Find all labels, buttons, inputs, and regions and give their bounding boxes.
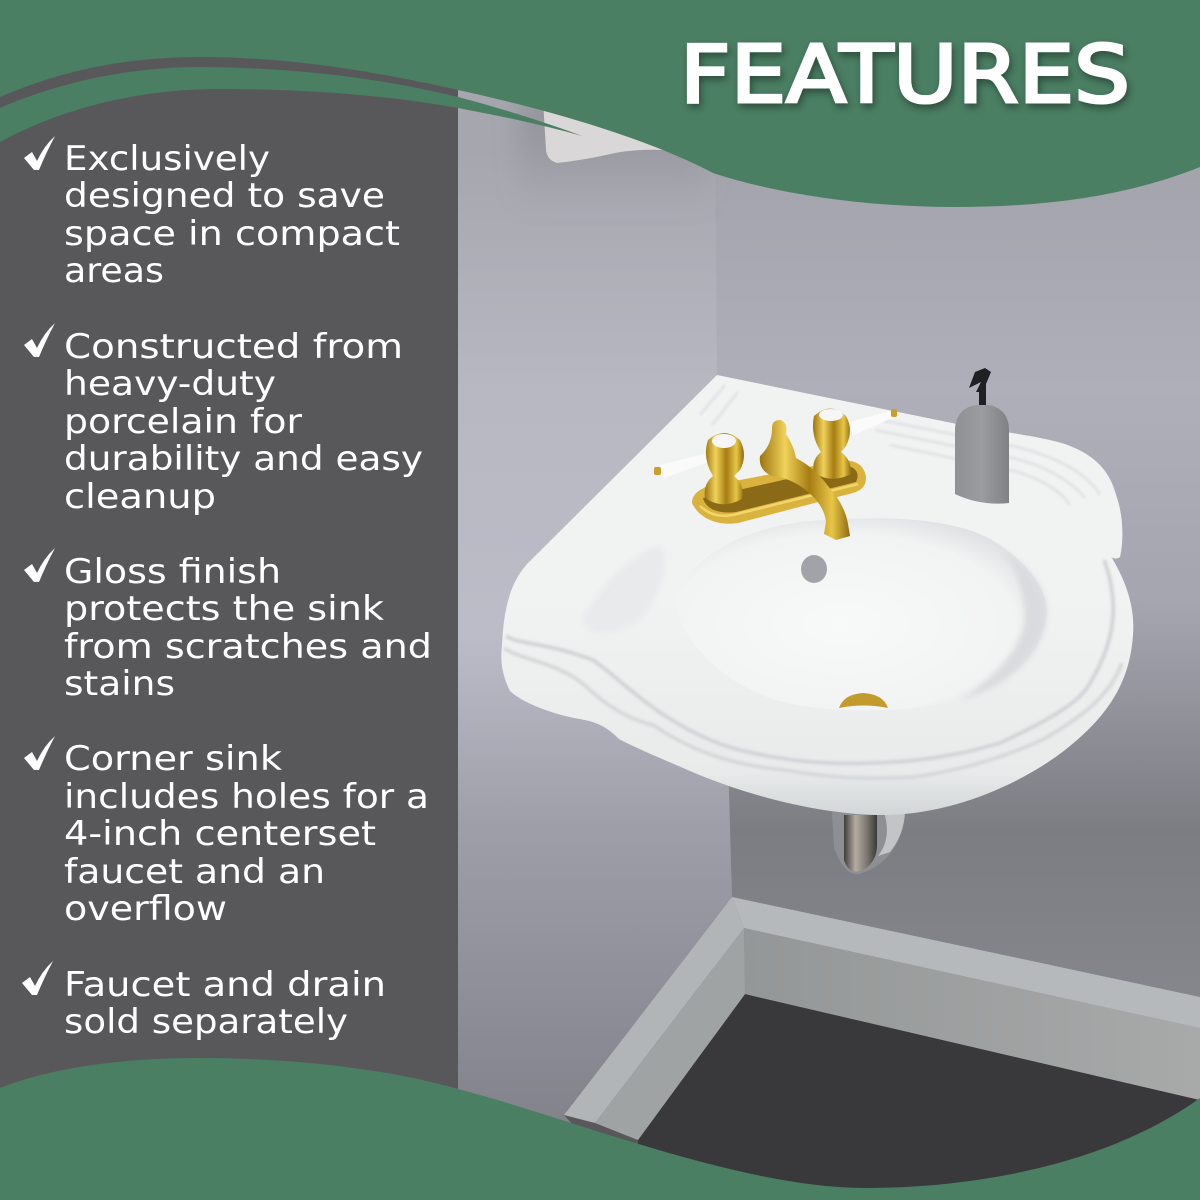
feature 5 (22, 961, 386, 1041)
gold faucet (654, 408, 897, 540)
text: feature 4: includes holes for a (64, 777, 429, 816)
text: feature 3: stains (64, 664, 175, 703)
title: FEATURES (680, 29, 1130, 121)
spout (760, 420, 850, 540)
feature 1 (24, 136, 400, 290)
text: feature 2 (64, 327, 423, 516)
text: feature 4: faucet and an (64, 852, 325, 891)
plate rim highlight (700, 484, 858, 516)
green accent swoosh (0, 67, 582, 142)
text: feature 4 (64, 739, 429, 928)
left soap dish hollow (582, 545, 665, 633)
text: feature 3 (64, 552, 432, 703)
right wall (714, 0, 1200, 1120)
outer moulding line (504, 648, 1122, 778)
text: feature 2: Constructed from (64, 327, 403, 366)
back ledge ribs (700, 385, 1100, 505)
inner moulding line (506, 560, 1113, 763)
left handle lever (654, 454, 708, 478)
text: feature 3: from scratches and (64, 627, 432, 666)
left handle (705, 433, 744, 504)
right handle lever (850, 409, 897, 436)
overflow hole (801, 555, 827, 583)
top green wave header (0, 0, 1200, 207)
floor (638, 994, 1200, 1200)
right handle (813, 408, 851, 479)
faucet base plate (692, 461, 866, 524)
wall-mounted white fixture (518, 100, 708, 210)
feature 3 (24, 548, 432, 703)
text: feature 3: Gloss finish (64, 552, 281, 591)
gold drain (839, 693, 888, 708)
text: feature 1: Exclusively (64, 139, 270, 178)
text: feature 2: heavy-duty (64, 364, 276, 403)
icon: check mark (24, 136, 55, 170)
feature 4 (24, 736, 429, 928)
text: feature 1: designed to save (64, 176, 385, 215)
text: feature 1: areas (64, 251, 164, 290)
baseboard (564, 897, 1200, 1140)
text: feature 2: durability and easy (64, 439, 423, 478)
text: feature 5 (64, 965, 386, 1041)
bottom green wave (0, 1058, 1200, 1200)
plate shading (703, 466, 858, 512)
text: feature 4: Corner sink (64, 739, 283, 778)
text: feature 5: Faucet and drain (64, 965, 386, 1004)
basin (675, 518, 1047, 710)
panel: dark feature list background (0, 0, 458, 1110)
basin right wall shading (960, 548, 1047, 700)
icon: check mark (24, 548, 55, 582)
text: feature 3: protects the sink (64, 589, 385, 628)
corner sink body (501, 375, 1133, 815)
text: feature 4: 4-inch centerset (64, 814, 376, 853)
icon: check mark (24, 323, 55, 357)
icon: check mark (24, 736, 55, 770)
left wall (458, 0, 732, 1200)
text: feature 1 (64, 139, 400, 290)
text: feature 1: space in compact (64, 214, 400, 253)
soap dispenser (955, 368, 1009, 504)
icon: check mark (22, 961, 53, 995)
drain pipe (832, 812, 905, 874)
feature 2 (24, 323, 423, 516)
photo: corner sink in bathroom (458, 0, 1200, 1200)
text: feature 2: porcelain for (64, 402, 302, 441)
text: feature 2: cleanup (64, 477, 216, 516)
text: feature 5: sold separately (64, 1002, 348, 1041)
text: feature 4: overflow (64, 889, 227, 928)
